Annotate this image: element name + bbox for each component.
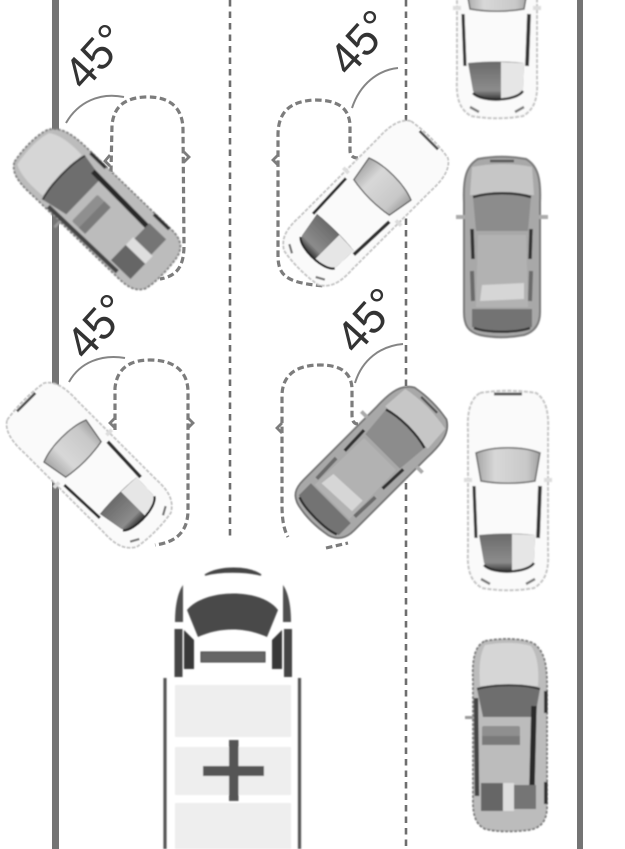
car: lower left angled, white <box>0 371 184 560</box>
road edge: left <box>52 0 59 849</box>
lane line: right dashed <box>405 0 407 849</box>
car: parked third, white <box>464 391 552 590</box>
truck: emergency vehicle <box>165 568 300 849</box>
dashed path: top left <box>105 97 189 279</box>
angle arc: lower left <box>69 357 125 382</box>
icon: medical cross <box>203 740 264 801</box>
angle label: top middle: 45° <box>319 0 402 85</box>
truck body <box>165 678 300 849</box>
dashed path: lower middle <box>277 365 358 548</box>
car: parked bottom, textured <box>465 639 548 831</box>
angle label: lower middle: 45° <box>326 278 409 363</box>
angle label: lower left: 45° <box>56 284 139 369</box>
dashed path: lower left <box>110 360 193 545</box>
car: top middle angled, white <box>271 109 460 298</box>
angle arc: top middle <box>352 68 398 108</box>
angle arc: lower middle <box>355 344 403 383</box>
car: lower middle angled, gray <box>281 371 463 553</box>
car: top left angled, textured <box>0 117 190 304</box>
dashed path: top middle <box>273 100 358 286</box>
car: parked top, cropped white <box>453 0 541 118</box>
angle arc: top left <box>66 96 124 123</box>
angle label: top left: 45° <box>54 14 137 99</box>
road edge: right <box>577 0 583 849</box>
lane line: centre dashed <box>229 0 231 540</box>
car: parked second, gray <box>456 157 548 337</box>
truck cab <box>174 568 292 677</box>
